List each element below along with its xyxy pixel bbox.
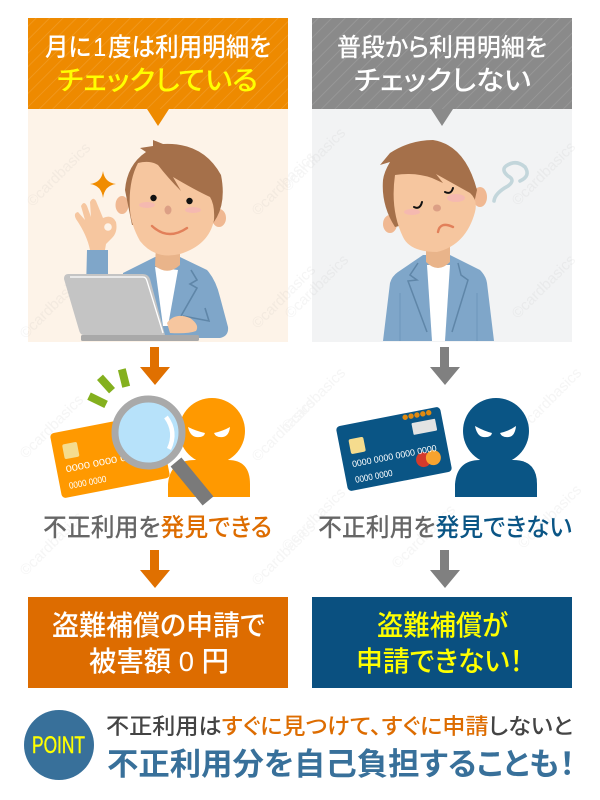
icon: orange sparkle [90,171,116,198]
arrow: left top [140,347,170,385]
lapel lines [408,263,468,332]
blush [139,202,155,208]
heading: right does not check statement: チェックしない [354,66,531,96]
watermark: faint site marks: ©cardbasics [249,395,319,465]
blush [404,209,420,215]
heading: right does not check statement: 普段から利用明細を [337,34,547,62]
badge: point: POINT [32,732,85,759]
mouth [152,226,187,234]
watermark: faint site marks: ©cardbasics [515,482,585,552]
icon: orange credit card: 0000 0000 0000 [65,449,145,474]
text: left result: 不正利用を発見できる [43,514,272,542]
callout: left outcome: 被害額 0 円 [89,646,229,677]
face [130,162,214,255]
jacket [120,257,228,338]
ok hand [75,199,116,250]
laptop screen [64,274,165,335]
nose [164,206,172,214]
callout: right outcome [312,597,572,688]
nose [433,204,441,212]
frown [438,225,453,232]
icon: navy credit card [336,406,452,492]
icon: navy credit card: 0000 0000 0000 0000 [351,443,438,469]
panel: right photo background [312,109,572,342]
watermark: faint site marks: ©cardbasics [509,139,579,209]
neck [155,245,180,271]
shirt [427,265,450,341]
hair [380,140,477,227]
text: right result: 不正利用を発見できない [318,514,572,542]
watermark: faint site marks: ©cardbasics [249,262,319,332]
face [394,174,476,252]
ears [473,187,487,207]
watermark: faint site marks: ©cardbasics [389,502,459,572]
heading: left checks statement: チェックしている [57,66,258,96]
hair [125,140,223,225]
watermark: faint site marks: ©cardbasics [279,365,349,435]
icon: navy thief [455,398,537,497]
callout: left outcome [28,597,288,688]
heading: right does not check statement [312,18,572,126]
callout: left outcome: 盗難補償の申請で [52,610,265,641]
watermark: faint site marks [17,125,585,589]
icon: green emphasis ticks [87,368,130,408]
arrow: right top [430,347,460,385]
shirt [155,267,178,326]
arrow: left bottom [140,550,170,588]
watermark: faint site marks: ©cardbasics [17,272,87,342]
icon: magnifying glass [115,399,208,501]
watermark: faint site marks: ©cardbasics [509,252,579,322]
text: point explanation: 不正利用は すぐに見つけて、すぐに申請 しないと [106,714,573,739]
closed eyes [414,188,453,208]
badge: point [24,710,94,780]
illustration: smiling man with laptop [64,140,228,341]
jacket [383,255,494,341]
text: point conclusion: 不正利用分を自己負担することも！ [107,747,575,782]
callout: right outcome: 盗難補償が [377,610,508,641]
watermark: faint site marks: ©cardbasics [279,485,349,555]
panel: left photo background [28,109,288,342]
watermark: faint site marks: ©cardbasics [17,509,87,579]
lapel lines [181,270,209,321]
icon: orange credit card [50,413,170,499]
laptop base [81,335,199,341]
watermark: faint site marks: ©cardbasics [249,149,319,219]
typing hand [167,316,197,333]
icon: question mark [494,163,527,201]
callout: right outcome: 申請できない！ [356,646,523,677]
watermark: faint site marks: ©cardbasics [249,519,319,589]
watermark: faint site marks: ©cardbasics [515,365,585,435]
eyes [150,195,157,201]
icon: orange thief [168,398,250,497]
watermark: faint site marks: ©cardbasics [24,140,94,210]
sleeve lines [400,293,477,341]
illustration: puzzled man [380,140,494,341]
icon: orange credit card: 0000 0000 [68,474,107,491]
watermark: faint site marks: ©cardbasics [279,125,349,195]
raised sleeve [86,250,125,290]
watermark: faint site marks: ©cardbasics [282,252,352,322]
watermark: faint site marks: ©cardbasics [17,392,87,462]
ears [116,196,128,214]
arrow: right bottom [430,550,460,588]
heading: left checks statement: 月に1度は利用明細を [45,34,271,62]
neck [426,245,450,268]
icon: navy credit card: 0000 0000 [354,468,393,485]
heading: left checks statement [28,18,288,126]
